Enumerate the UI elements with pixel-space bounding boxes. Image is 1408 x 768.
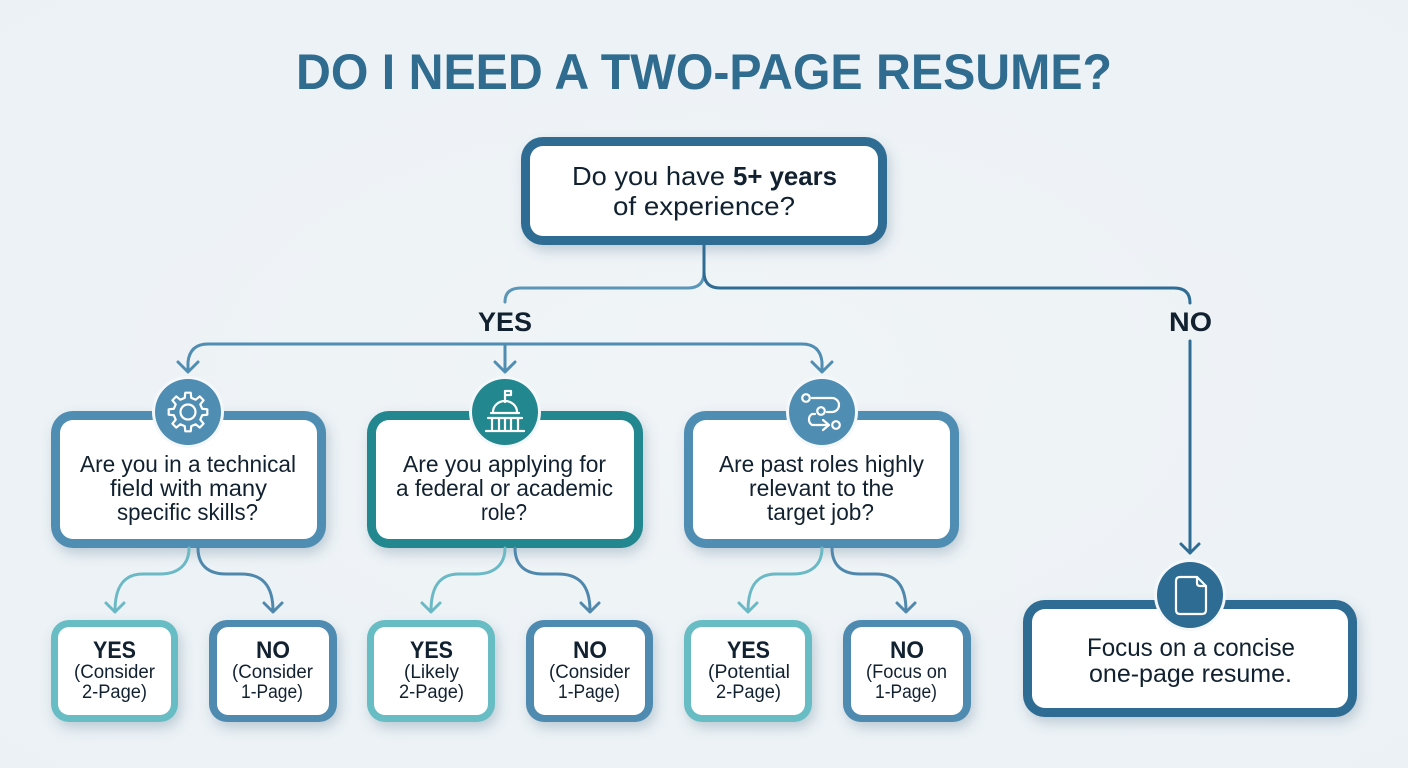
title: DO I NEED A TWO-PAGE RESUME? (296, 44, 1112, 100)
connectors: relevant roles branches (739, 548, 915, 612)
panel: federal or academic question: Are you applying for (403, 451, 606, 477)
outcome: yes potential 2-page: 2-Page) (716, 682, 781, 703)
outcome: no consider 1-page: (Consider (232, 662, 314, 683)
panel: technical field question: specific skills? (117, 499, 258, 525)
icon: gear (152, 376, 224, 448)
panel: relevant roles question: relevant to the (749, 475, 894, 501)
label: NO: NO (1169, 307, 1212, 337)
panel: technical field question: Are you in a technical (80, 451, 296, 477)
outcome: no focus on 1-page: 1-Page) (875, 682, 937, 703)
panel: one-page result (1023, 600, 1357, 717)
outcome: yes potential 2-page (684, 620, 812, 722)
outcome: no focus on 1-page (843, 620, 971, 722)
outcome: yes likely 2-page: YES (410, 637, 453, 664)
outcome: yes consider 2-page: YES (93, 637, 136, 664)
panel: relevant roles question: target job? (767, 499, 874, 525)
outcome: no consider 1-page (526, 620, 653, 722)
connector: top question to NO (704, 245, 1190, 303)
outcome: yes potential 2-page: YES (727, 637, 770, 664)
outcome: yes consider 2-page (51, 620, 178, 722)
outcome: yes likely 2-page (367, 620, 495, 722)
outcome: no consider 1-page: 1-Page) (558, 682, 620, 703)
panel: technical field question (51, 411, 326, 548)
outcome: yes likely 2-page: 2-Page) (399, 682, 464, 703)
arrow: NO to one-page result (1181, 341, 1199, 553)
arrows: YES to three questions (178, 344, 832, 372)
panel: technical field question: field with many (110, 475, 268, 501)
outcome: no consider 1-page: 1-Page) (241, 682, 303, 703)
outcome: yes likely 2-page: (Likely (404, 662, 459, 683)
panel: one-page result: one-page resume. (1089, 660, 1292, 688)
connector: top question to YES (505, 245, 704, 302)
outcome: no focus on 1-page: NO (890, 637, 924, 664)
panel: 5+ years question: 5+ years (733, 161, 837, 191)
outcome: no focus on 1-page: (Focus on (866, 662, 947, 683)
outcome: no consider 1-page (209, 620, 337, 722)
panel: federal or academic question: a federal or academic (396, 475, 613, 501)
icon: document (1154, 559, 1226, 631)
outcome: yes potential 2-page: (Potential (708, 662, 790, 683)
outcome: no consider 1-page: (Consider (549, 662, 631, 683)
icon: process flow (786, 376, 858, 448)
connectors: technical field branches (106, 548, 282, 612)
panel: relevant roles question: Are past roles highly (719, 451, 924, 477)
panel: 5+ years question: of experience? (613, 191, 795, 221)
panel: federal or academic question (367, 411, 643, 548)
outcome: yes consider 2-page: (Consider (74, 662, 156, 683)
panel: one-page result: Focus on a concise (1087, 634, 1295, 662)
panel: federal or academic question: role? (481, 499, 527, 525)
panel: 5+ years question: Do you have (572, 161, 725, 191)
connectors: federal or academic branches (422, 548, 599, 612)
label: YES: YES (478, 307, 532, 337)
outcome: no consider 1-page: NO (256, 637, 290, 664)
panel: relevant roles question (684, 411, 959, 548)
icon: capitol building (469, 376, 541, 448)
outcome: yes consider 2-page: 2-Page) (82, 682, 147, 703)
outcome: no consider 1-page: NO (573, 637, 607, 664)
panel: 5+ years question (521, 137, 887, 245)
